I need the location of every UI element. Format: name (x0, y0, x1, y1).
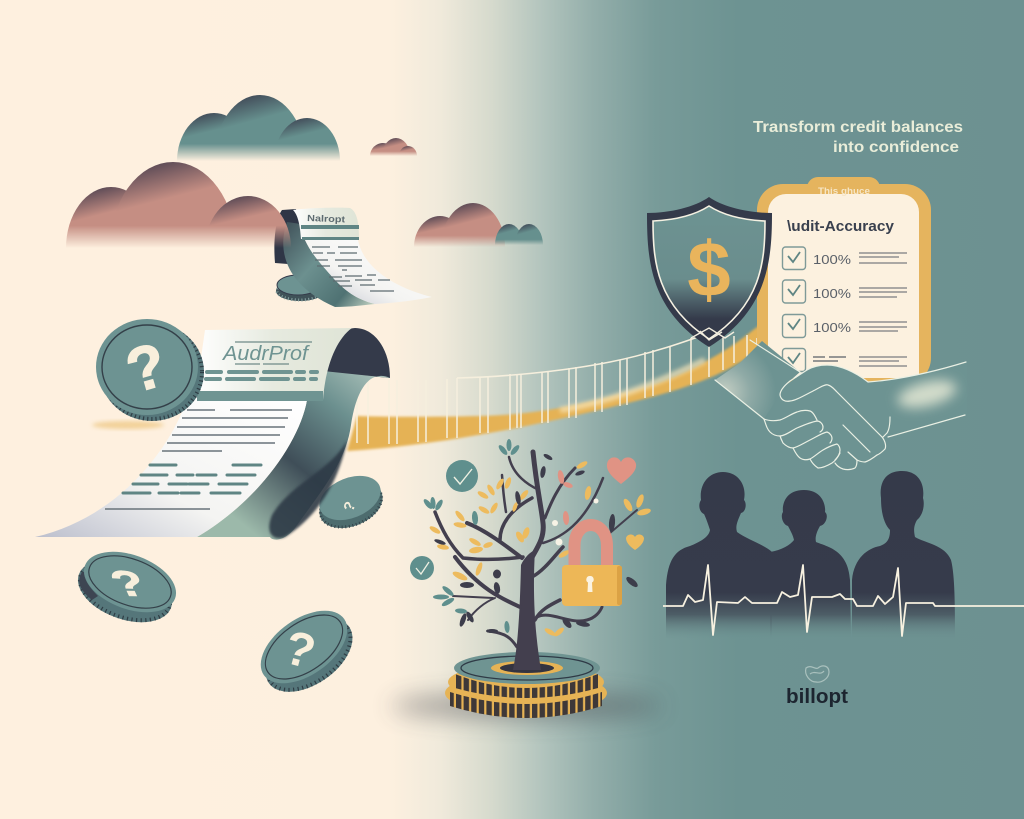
receipt dashes (123, 465, 261, 493)
checkbox (782, 348, 806, 372)
handshake (715, 340, 967, 470)
question mark: ? (119, 330, 174, 407)
small coin under receipt (313, 467, 389, 537)
coin: question mark, lower left (69, 540, 184, 634)
bridge railing (357, 330, 757, 444)
small receipt paper (305, 240, 432, 304)
check badge large (446, 460, 478, 492)
audit accuracy card (757, 177, 931, 384)
question mark: ? (279, 621, 321, 680)
small receipt text lines (312, 247, 394, 291)
card tab label: This ghuce (818, 186, 870, 196)
cloud: teal top (177, 95, 340, 161)
value: 100% (813, 252, 852, 267)
coin edge (100, 323, 204, 421)
small receipt strips (301, 225, 359, 240)
lines (859, 322, 907, 331)
gold bridge band (347, 320, 767, 451)
receipt paper (35, 400, 307, 537)
title line two: into confidence (833, 139, 959, 156)
checkbox (782, 314, 806, 338)
shield inner (653, 206, 765, 339)
pink leaves (557, 470, 574, 525)
card heading: \udit-Accuracy (787, 218, 895, 235)
question mark: ? (103, 563, 153, 604)
small receipt label: Nalropt (307, 213, 345, 224)
dollar sign: $ (687, 225, 731, 313)
tree branches (435, 452, 637, 647)
person 2 (770, 490, 851, 640)
bridge (92, 320, 767, 451)
receipt header dashes (206, 372, 317, 379)
coin: question mark, top left (96, 319, 204, 421)
brand logo (786, 666, 848, 708)
receipt header (195, 328, 352, 400)
coin ring (102, 325, 192, 409)
receipt header strip (197, 391, 323, 401)
tree on coin stack (410, 439, 652, 718)
small receipt header (293, 208, 359, 239)
logo icon (806, 666, 829, 682)
coin stack base (445, 652, 607, 718)
coin ring (254, 602, 354, 692)
receipt teal curl (197, 371, 390, 540)
small receipt illustration (274, 208, 432, 307)
lines (859, 288, 907, 297)
dark leaves (434, 453, 639, 633)
coin mark: ? (340, 499, 360, 514)
receipt title: AudrProf (222, 343, 311, 365)
small receipt curl body (283, 222, 375, 307)
coin ridges (72, 550, 178, 632)
people silhouettes with heartbeat (663, 471, 1024, 640)
bridge highlight (560, 360, 705, 410)
heart pink (607, 457, 636, 484)
shield outer (647, 197, 772, 347)
title line one: Transform credit balances (753, 119, 963, 136)
white dots (552, 498, 598, 546)
coin face (76, 540, 184, 624)
row 3 (782, 314, 907, 338)
top coin face (454, 652, 600, 684)
lines (859, 253, 907, 263)
receipt dark tail (269, 440, 347, 538)
lower ridges (450, 692, 602, 718)
railing crossing shield (691, 328, 734, 340)
coin face (248, 596, 360, 698)
padlock shackle (574, 525, 607, 567)
gold smear behind coin (92, 421, 164, 429)
upper ridges (455, 674, 598, 698)
cloud: large pink (66, 162, 291, 248)
card tab (807, 177, 880, 201)
small coin (276, 275, 324, 301)
card frame (757, 184, 931, 384)
checkbox (782, 247, 806, 270)
teal leaves (422, 439, 521, 633)
gold ring (491, 661, 563, 675)
coin face (313, 467, 387, 529)
coin ridges (314, 474, 388, 536)
logo text: billopt (786, 685, 848, 708)
main receipt illustration (35, 328, 390, 540)
row 1 (782, 247, 907, 270)
value: 100% (813, 320, 852, 335)
soil (500, 663, 554, 673)
lines (859, 357, 907, 366)
gold middle coin (448, 663, 604, 701)
coin dark edge (79, 572, 98, 600)
gold leaves (429, 460, 652, 638)
row 2 (782, 280, 907, 303)
coin edge (313, 473, 389, 537)
check badge small (410, 556, 434, 580)
receipt thin lines (105, 410, 292, 509)
handshake outlines (715, 340, 966, 470)
padlock shade (617, 566, 622, 605)
coin face (96, 319, 198, 415)
heartbeat line (663, 565, 1024, 636)
cloud: small pink (370, 138, 417, 156)
small receipt dark curl (274, 209, 301, 264)
coin ridges (102, 325, 202, 419)
checkbox (782, 280, 806, 303)
padlock body (562, 565, 622, 606)
padlock (562, 525, 622, 606)
coin ridges (255, 606, 363, 704)
person 3 (852, 471, 955, 640)
coin edge (252, 603, 366, 707)
shield with dollar sign (647, 197, 772, 347)
card inner (768, 194, 919, 378)
placeholder dashes (813, 357, 846, 361)
coin: question mark, lower centre (248, 596, 366, 707)
tree trunk (513, 550, 541, 670)
coin edge (69, 548, 181, 634)
coin ring (82, 546, 178, 618)
right hand and arm fill (764, 362, 967, 469)
row 4 (782, 348, 907, 372)
top coin ring (461, 656, 593, 680)
cloud: right small teal (495, 224, 543, 245)
heart gold (626, 534, 644, 550)
cloud: right pink (414, 203, 505, 247)
receipt header rules (235, 342, 312, 364)
left arm (715, 341, 810, 420)
arm highlight (895, 375, 959, 413)
shadow under coin stack (391, 693, 661, 719)
value: 100% (813, 286, 852, 301)
gold base coin (445, 672, 607, 714)
padlock keyhole (586, 576, 594, 592)
person 1 (666, 472, 772, 640)
title text (753, 119, 963, 156)
receipt dark curl (325, 328, 390, 378)
